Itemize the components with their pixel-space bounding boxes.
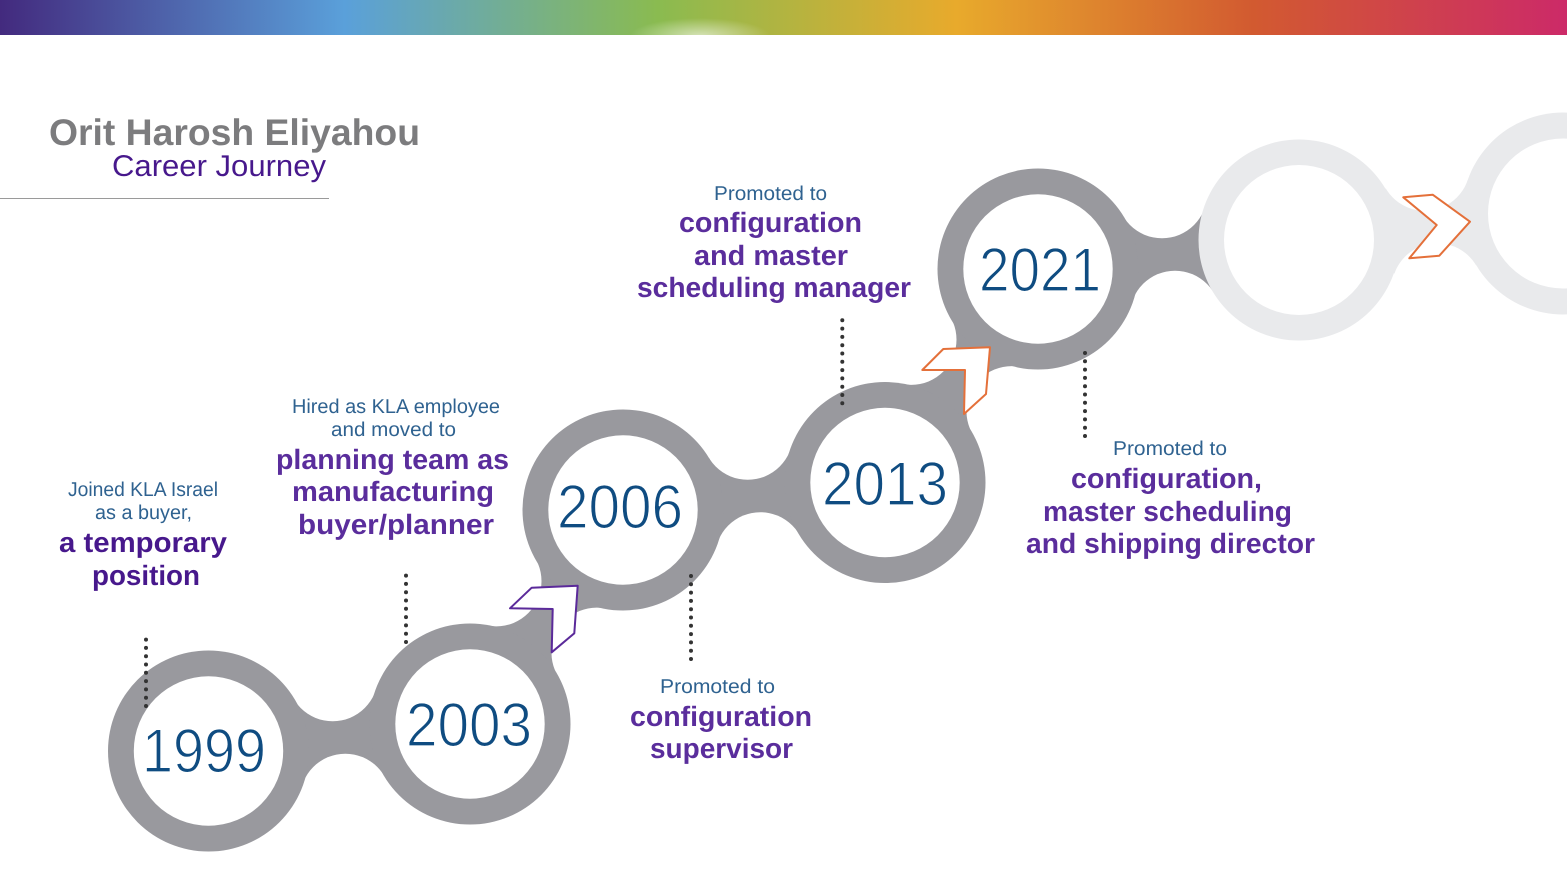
title block bbox=[0, 112, 420, 198]
text block: 1999 milestone: position bbox=[92, 560, 200, 591]
text block: 2006 milestone: configuration bbox=[630, 701, 812, 732]
text block: 1999 milestone: Joined KLA Israel bbox=[68, 479, 218, 501]
text block: 2003 milestone: planning team as bbox=[276, 444, 509, 475]
arrow: purple bbox=[510, 586, 578, 652]
ring: 2003 bbox=[370, 624, 570, 824]
title: Orit Harosh Eliyahou bbox=[49, 112, 420, 153]
ring: 1999 bbox=[108, 650, 309, 852]
year: 2003: 2003 bbox=[406, 691, 532, 760]
dotted leader: 2006 bbox=[689, 575, 693, 659]
faded future path bbox=[1038, 112, 1567, 361]
text block: 1999 milestone bbox=[59, 479, 227, 591]
text block: 1999 milestone: a temporary bbox=[59, 527, 227, 558]
text block: 2003 milestone: and moved to bbox=[331, 419, 456, 441]
ring: 2006 bbox=[522, 410, 724, 610]
year: 2006: 2006 bbox=[557, 473, 683, 542]
text block: 1999 milestone: as a buyer, bbox=[95, 502, 192, 524]
arrow: orange bbox=[922, 347, 990, 414]
text block: 2021 milestone: Promoted to bbox=[1113, 438, 1227, 460]
text block: 2006 milestone: Promoted to bbox=[660, 676, 775, 698]
text block: 2021 milestone: and shipping director bbox=[1026, 528, 1315, 559]
dotted leader: 2003 bbox=[404, 575, 408, 642]
text block: 2003 milestone: buyer/planner bbox=[298, 509, 494, 540]
arrow: orange right bbox=[1403, 195, 1470, 258]
dotted leader: 1999 bbox=[144, 632, 148, 706]
text block: 2021 milestone: master scheduling bbox=[1043, 496, 1292, 527]
text block: 2013 milestone: Promoted to bbox=[714, 183, 827, 205]
text block: 2003 milestone: manufacturing bbox=[292, 476, 494, 507]
dotted leader: 2013 bbox=[840, 317, 844, 403]
text block: 2013 milestone: scheduling manager bbox=[637, 272, 911, 303]
ring: 2021 bbox=[938, 168, 1138, 370]
year: 2021: 2021 bbox=[979, 236, 1101, 305]
year: 1999: 1999 bbox=[142, 717, 266, 786]
text block: 2003 milestone bbox=[276, 396, 509, 540]
timeline path bbox=[108, 168, 1138, 852]
text block: 2013 milestone bbox=[637, 183, 911, 303]
text block: 2006 milestone bbox=[630, 676, 812, 764]
subtitle: Career Journey bbox=[112, 150, 326, 183]
text block: 2003 milestone: Hired as KLA employee bbox=[292, 396, 500, 418]
rainbow top bar bbox=[0, 0, 1567, 54]
text block: 2013 milestone: configuration bbox=[679, 207, 862, 238]
ring: 2013 bbox=[784, 382, 986, 583]
text block: 2021 milestone bbox=[1026, 438, 1315, 559]
year: 2013: 2013 bbox=[822, 450, 948, 519]
text block: 2021 milestone: configuration, bbox=[1071, 463, 1262, 494]
dotted leader: 2021 bbox=[1083, 349, 1087, 436]
text block: 2006 milestone: supervisor bbox=[650, 733, 793, 764]
text block: 2013 milestone: and master bbox=[694, 240, 848, 271]
